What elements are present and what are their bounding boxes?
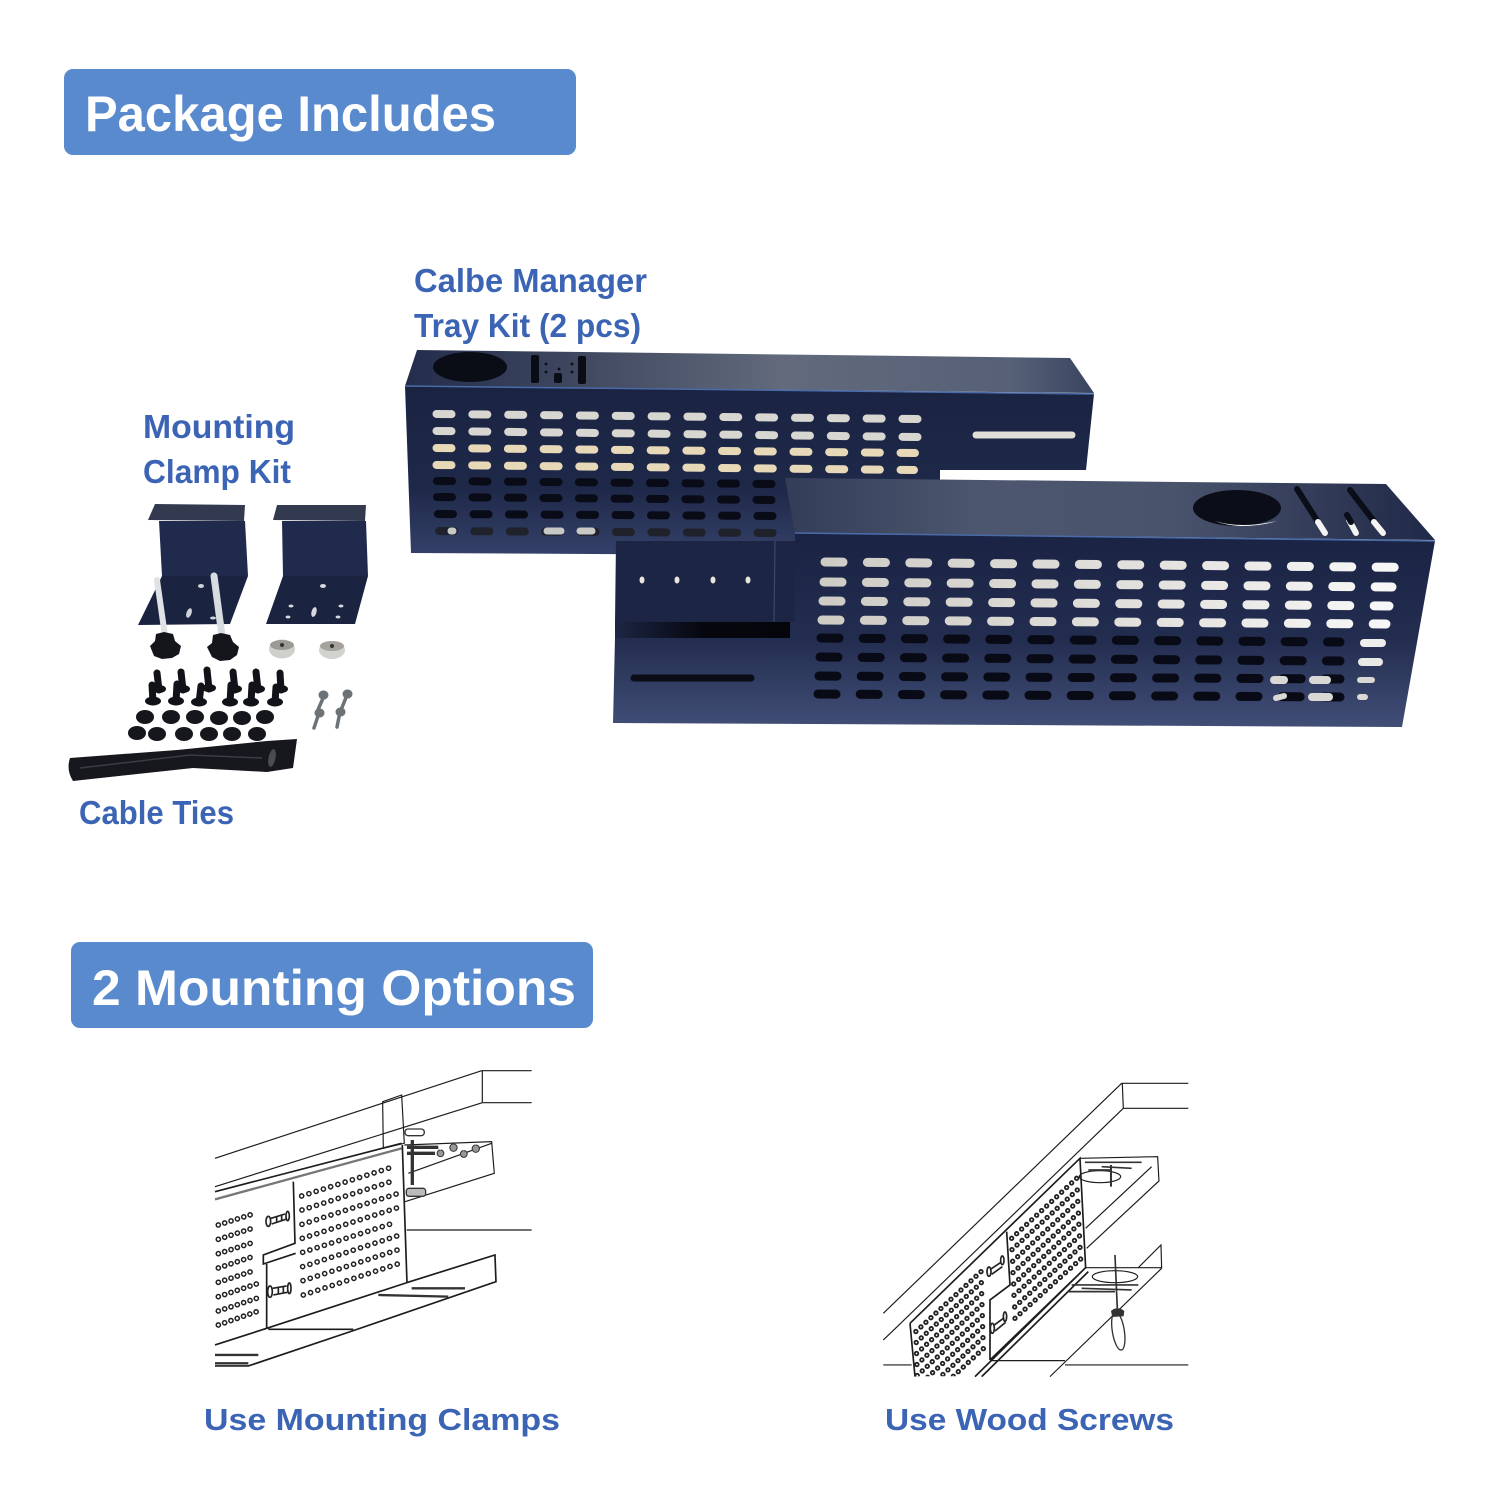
tray front panel outlines — [910, 1158, 1088, 1377]
caption: use mounting clamps: Use Mounting Clamps — [204, 1402, 560, 1437]
clamp bracket left — [138, 504, 248, 625]
machine screw heads — [145, 684, 288, 706]
clamp bracket right — [266, 505, 368, 624]
connector bolts — [266, 1211, 291, 1297]
front tray light slots — [822, 562, 1395, 624]
front tray end gap — [615, 622, 790, 638]
product photo: mounting clamps and hardware — [69, 504, 368, 781]
rear tray top slots — [531, 355, 586, 384]
perforated panel left — [913, 1269, 986, 1376]
cable tie — [69, 739, 297, 781]
heading: Package Includes: Package Includes — [85, 86, 496, 142]
heading: 2 Mounting Options: 2 Mounting Options — [92, 960, 576, 1016]
caption: use wood screws: Use Wood Screws — [885, 1402, 1174, 1437]
label: Cable Manager Tray Kit — [414, 262, 647, 344]
rear tray long slot — [976, 432, 1072, 438]
clamp bracket screws — [437, 1144, 479, 1157]
wood screws — [314, 694, 348, 728]
rear tray light slots — [436, 414, 918, 437]
threaded rods — [157, 576, 222, 636]
underside slots — [215, 1288, 465, 1363]
machine screws — [152, 670, 281, 703]
clamp hardware — [405, 1129, 438, 1196]
product photo: front cable tray — [613, 478, 1435, 727]
tray top cutout — [1079, 1162, 1142, 1187]
tray top flange — [1080, 1157, 1159, 1248]
front tray small holes — [640, 576, 750, 584]
front tray top face — [785, 478, 1435, 540]
label: Mounting Clamp Kit: Mounting — [143, 408, 295, 445]
label: Mounting Clamp Kit — [143, 408, 295, 490]
tray bottom cutout — [1068, 1271, 1138, 1292]
screwdriver — [1109, 1255, 1127, 1351]
front tray top slots — [1297, 489, 1383, 533]
front tray cup hole — [1193, 490, 1281, 526]
line drawing: use wood screws — [883, 1083, 1188, 1410]
rear tray dark slots — [437, 481, 775, 516]
washers — [269, 640, 345, 659]
label: Mounting Clamp Kit: Clamp Kit — [143, 453, 291, 490]
clamp knobs — [150, 632, 239, 661]
perforated panel right — [302, 1166, 398, 1295]
clamp over desk — [383, 1095, 404, 1148]
rear tray front face — [405, 386, 1094, 556]
front tray main face — [613, 533, 1435, 727]
desk edge — [215, 1071, 532, 1187]
perforated panel right — [1012, 1178, 1083, 1318]
rear tray cup hole — [433, 352, 507, 382]
line drawing: use mounting clamps — [215, 1071, 532, 1366]
connector bolts — [987, 1256, 1007, 1333]
tray panel outlines — [215, 1143, 496, 1366]
front tray long slot — [634, 674, 751, 682]
product photo: rear cable tray — [405, 350, 1094, 556]
heading: Package Includes — [64, 69, 576, 155]
front tray see-through bits — [1274, 643, 1382, 698]
tray top edge — [215, 1148, 402, 1199]
desk edge — [883, 1083, 1188, 1365]
rear tray see-through bits — [451, 528, 592, 534]
rear tray top face — [405, 350, 1094, 393]
tray bottom flange — [1050, 1245, 1162, 1377]
label: Cable Manager Tray Kit: Calbe Manager — [414, 262, 647, 299]
heading: 2 Mounting Options — [71, 942, 593, 1028]
clamp bracket — [404, 1142, 532, 1230]
front tray dark slots — [818, 638, 1340, 697]
label: Cable Manager Tray Kit: Tray Kit (2 pcs) — [414, 307, 641, 344]
flange nuts — [128, 710, 274, 741]
label: Cable Ties: Cable Ties — [79, 794, 234, 831]
perforated panel left — [218, 1213, 257, 1325]
front tray end tab — [615, 541, 795, 622]
